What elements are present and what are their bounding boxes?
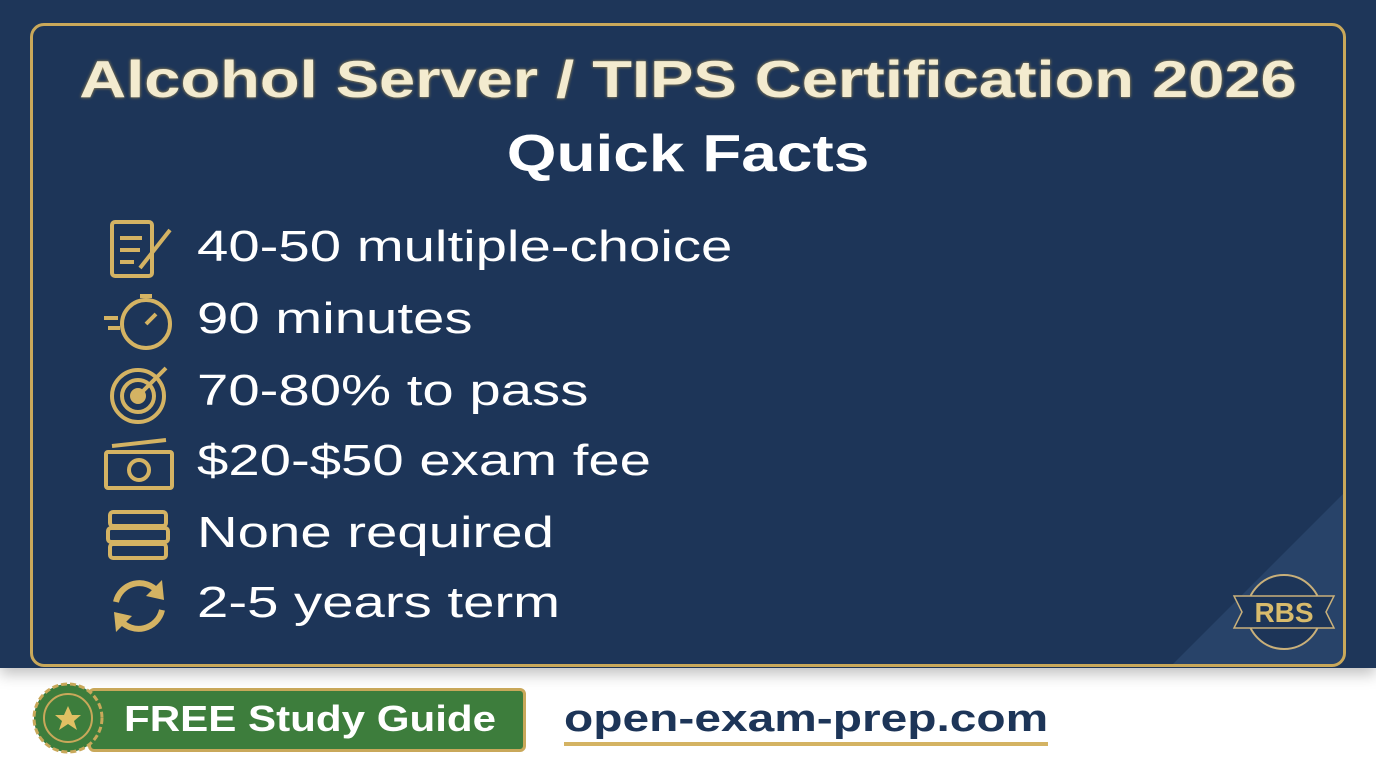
button: free study guide — [32, 682, 526, 754]
item: pass — [110, 366, 588, 424]
button: free study guide: FREE Study Guide — [124, 698, 496, 739]
item: time: 90 minutes — [197, 294, 472, 343]
item: term: 2-5 years term — [197, 578, 560, 627]
item: prerequisites: None required — [197, 508, 554, 557]
url: open-exam-prep.com — [564, 698, 1048, 740]
badge: RBS: RBS — [1254, 597, 1314, 628]
item: questions: 40-50 multiple-choice — [197, 222, 732, 271]
badge: RBS — [1232, 574, 1336, 650]
item: pass: 70-80% to pass — [197, 366, 588, 415]
subtitle: Quick Facts — [507, 125, 869, 183]
item: fee: $20-$50 exam fee — [197, 436, 651, 485]
item: time — [104, 294, 472, 350]
title: Alcohol Server / TIPS Certification 2026 — [79, 51, 1297, 109]
